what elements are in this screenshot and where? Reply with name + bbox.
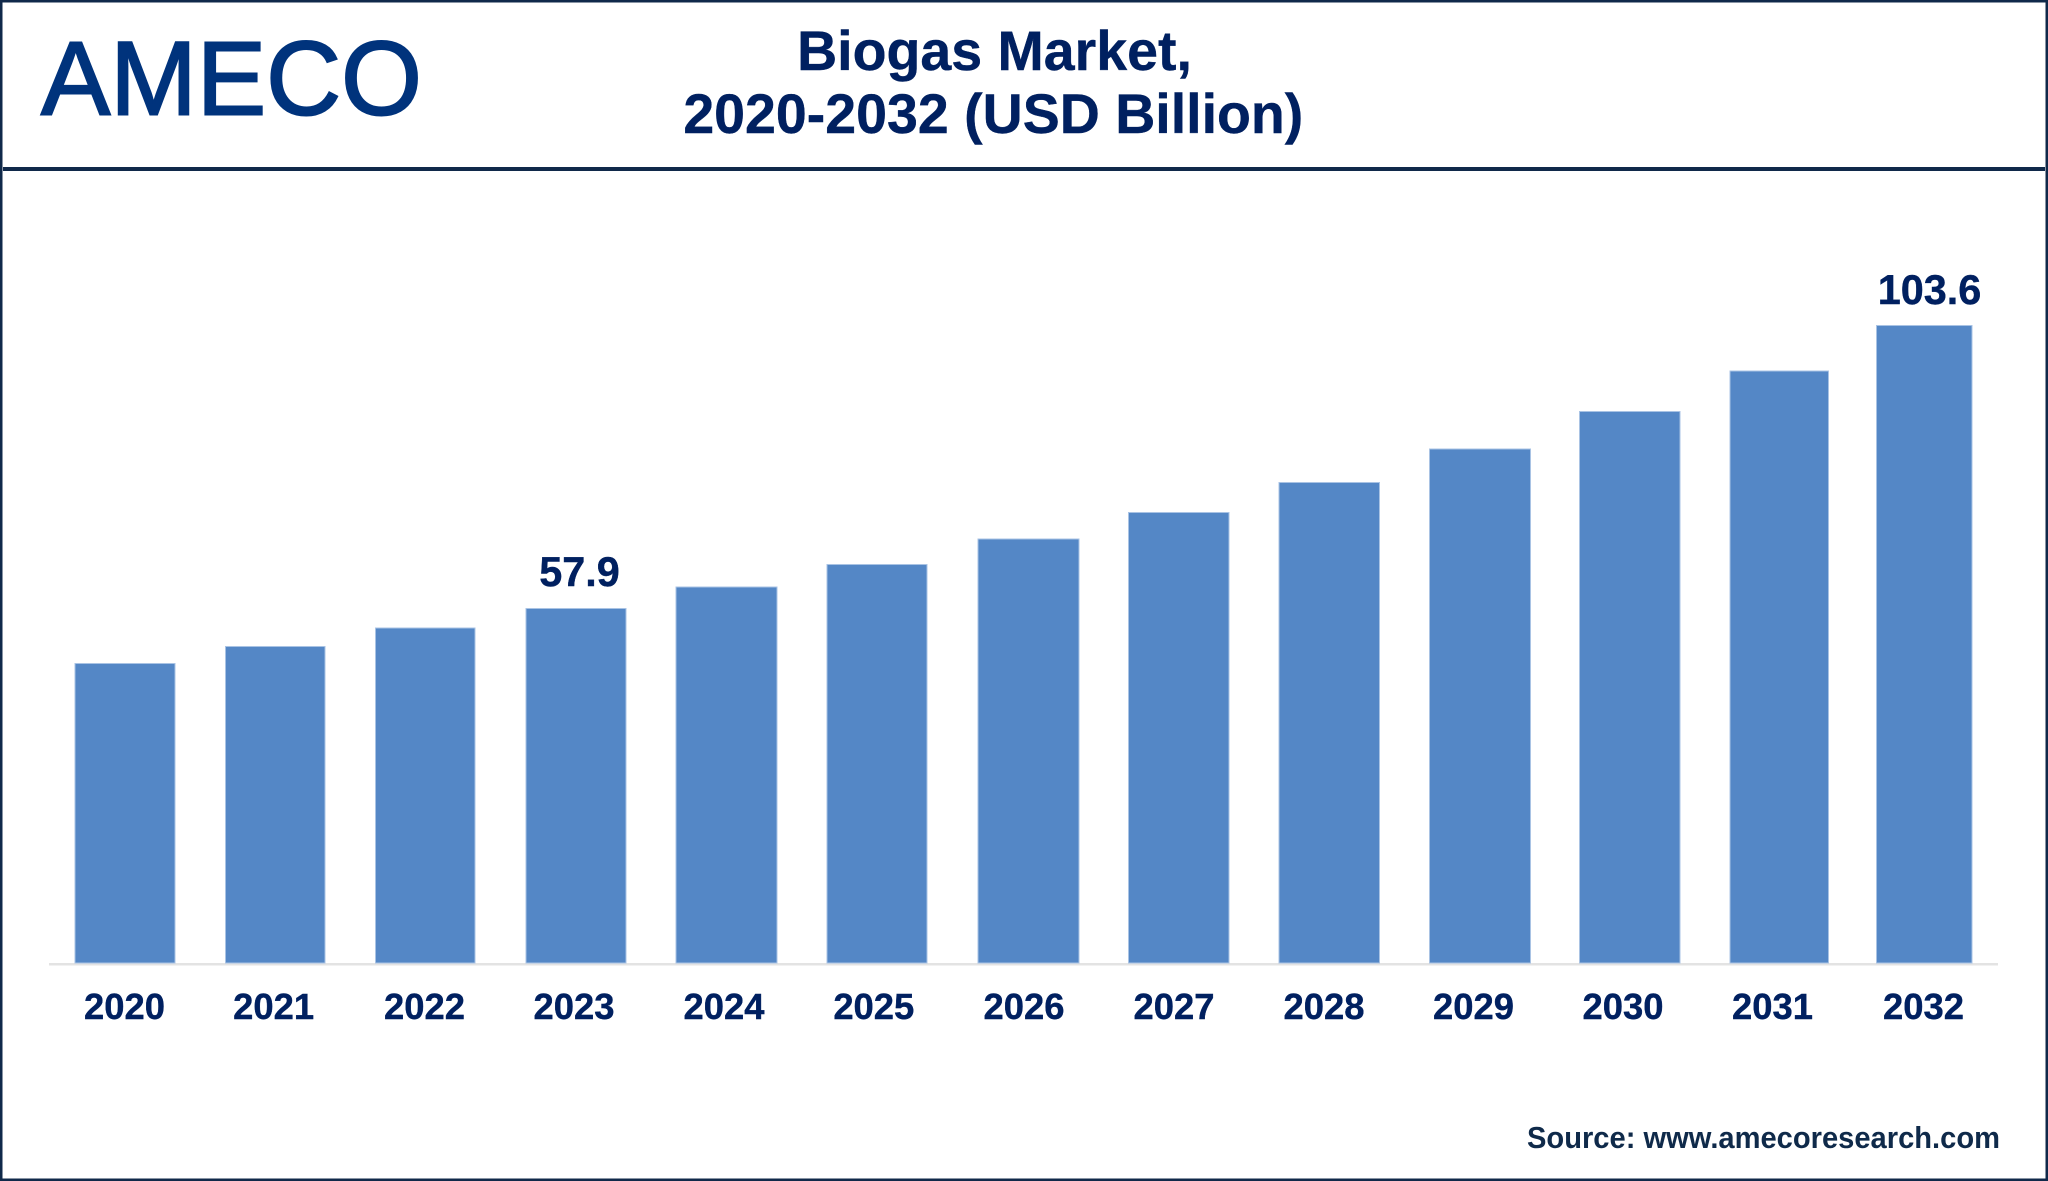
x axis year labels: 2023 — [534, 986, 614, 1027]
logo: AMECO: AMECO — [41, 20, 422, 138]
bars — [75, 326, 1972, 963]
x axis year labels: 2028 — [1284, 986, 1364, 1027]
x axis year labels: 2025 — [833, 986, 914, 1027]
x axis year labels: 2022 — [384, 986, 465, 1027]
title: 2020-2032 (USD Billion) — [683, 83, 1303, 145]
bar chart — [49, 267, 1998, 1027]
x axis year labels — [84, 986, 1964, 1027]
x axis year labels: 2030 — [1583, 986, 1663, 1027]
value label 2023: 57.9 — [539, 549, 620, 595]
x axis year labels: 2032 — [1883, 986, 1964, 1027]
x axis year labels: 2029 — [1433, 986, 1514, 1027]
x axis year labels: 2031 — [1732, 986, 1813, 1027]
title: Biogas Market, — [797, 20, 1192, 82]
x axis year labels: 2024 — [684, 986, 765, 1027]
x axis line — [49, 963, 1998, 966]
header divider — [3, 167, 2045, 171]
value label 2032: 103.6 — [1878, 267, 1981, 313]
x axis year labels: 2027 — [1134, 986, 1214, 1027]
title — [683, 20, 1303, 145]
source note: Source: www.amecoresearch.com — [1527, 1120, 2000, 1155]
x axis year labels: 2020 — [84, 986, 165, 1027]
x axis year labels: 2021 — [233, 986, 314, 1027]
x axis year labels: 2026 — [984, 986, 1064, 1027]
